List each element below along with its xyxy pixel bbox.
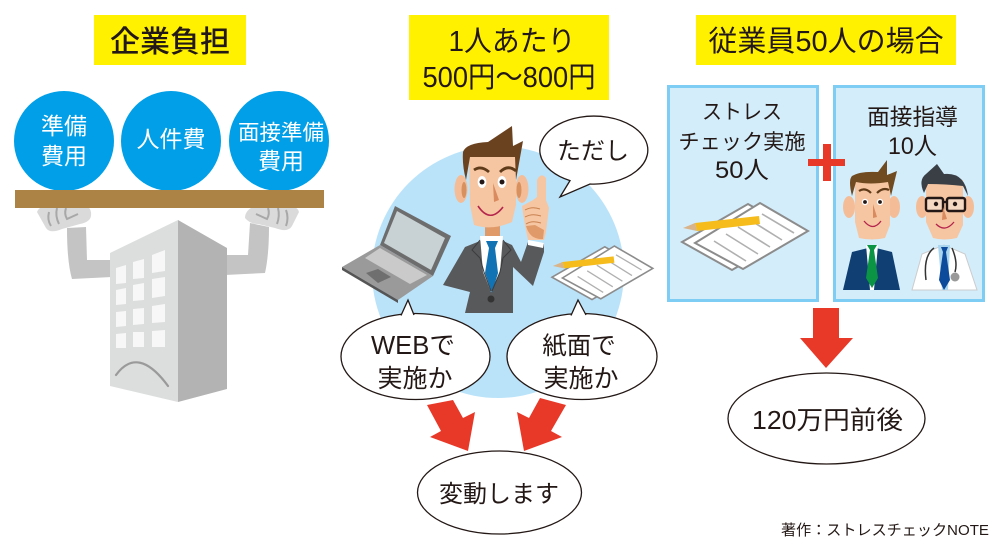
- panel: 従業員50人の場合: [668, 86, 984, 464]
- icon: cost circle 面接準備費用: [229, 91, 329, 191]
- background circle: [372, 146, 624, 398]
- heading: 従業員50人の場合: [696, 15, 956, 65]
- heading: 従業員50人の場合: 従業員50人の場合: [708, 25, 944, 58]
- callout: 紙面で実施か: [507, 300, 657, 400]
- panel: ストレスチェック実施 50人: [668, 86, 818, 300]
- callout: ただし: [540, 116, 648, 197]
- callout: WEBで実施か: [341, 300, 490, 400]
- arrow: down to result: [800, 308, 853, 368]
- panel: 面接指導 10人: [834, 86, 984, 300]
- callout: WEBで実施か: WEBで: [371, 332, 455, 360]
- callout: 変動します: 変動します: [439, 481, 559, 508]
- panel: 面接指導 10人: 面接指導: [867, 104, 958, 130]
- callout: ただし: ただし: [557, 138, 629, 165]
- icon: businessman in green tie: [843, 160, 900, 290]
- icon: cost circle 人件費: [121, 91, 221, 191]
- panel: 1人あたり illustration: [341, 116, 657, 534]
- icon: businessman pointing: [443, 126, 549, 313]
- icon: paper and pencil: [552, 246, 653, 300]
- panel: 企業負担 illustration: [14, 91, 329, 402]
- callout: 120万円前後: 120万円前後: [752, 407, 903, 435]
- callout: 120万円前後: [728, 373, 925, 464]
- callout: 紙面で実施か: 紙面で: [542, 332, 616, 360]
- arrow: WEB to result: [427, 400, 475, 451]
- panel: ストレスチェック実施 50人: 50人: [715, 157, 769, 184]
- icon: cost circle 準備費用: 費用: [41, 143, 87, 169]
- icon: cost circle 面接準備費用: 面接準備: [238, 121, 324, 145]
- icon: plus mark: [808, 144, 845, 181]
- heading: 企業負担: [94, 15, 246, 65]
- icon: cost circle 人件費: 人件費: [136, 126, 206, 152]
- panel: ストレスチェック実施 50人: チェック実施: [678, 130, 806, 154]
- icon: cost circle 準備費用: [14, 91, 114, 191]
- icon: cost circle 準備費用: 準備: [41, 113, 87, 139]
- heading: 企業負担: 企業負担: [110, 26, 230, 59]
- heading: 1人あたり: 500円～800円: [422, 62, 596, 94]
- icon: doctor with stethoscope: [912, 164, 977, 290]
- callout: WEBで実施か: 実施か: [377, 365, 453, 393]
- beam: [15, 190, 324, 208]
- panel: ストレスチェック実施 50人: ストレス: [702, 101, 782, 124]
- callout: 変動します: [418, 451, 582, 534]
- icon: cost circle 面接準備費用: 費用: [258, 148, 304, 174]
- icon: building lifting a beam: [37, 205, 299, 402]
- arrow: paper to result: [517, 398, 566, 451]
- heading: 1人あたり: [409, 15, 609, 100]
- callout: 紙面で実施か: 実施か: [543, 365, 619, 393]
- panel: 面接指導 10人: 10人: [888, 133, 937, 160]
- credit: 著作：ストレスチェックNOTE: [781, 522, 989, 539]
- heading: 1人あたり: 1人あたり: [448, 26, 576, 58]
- icon: laptop: [342, 206, 451, 303]
